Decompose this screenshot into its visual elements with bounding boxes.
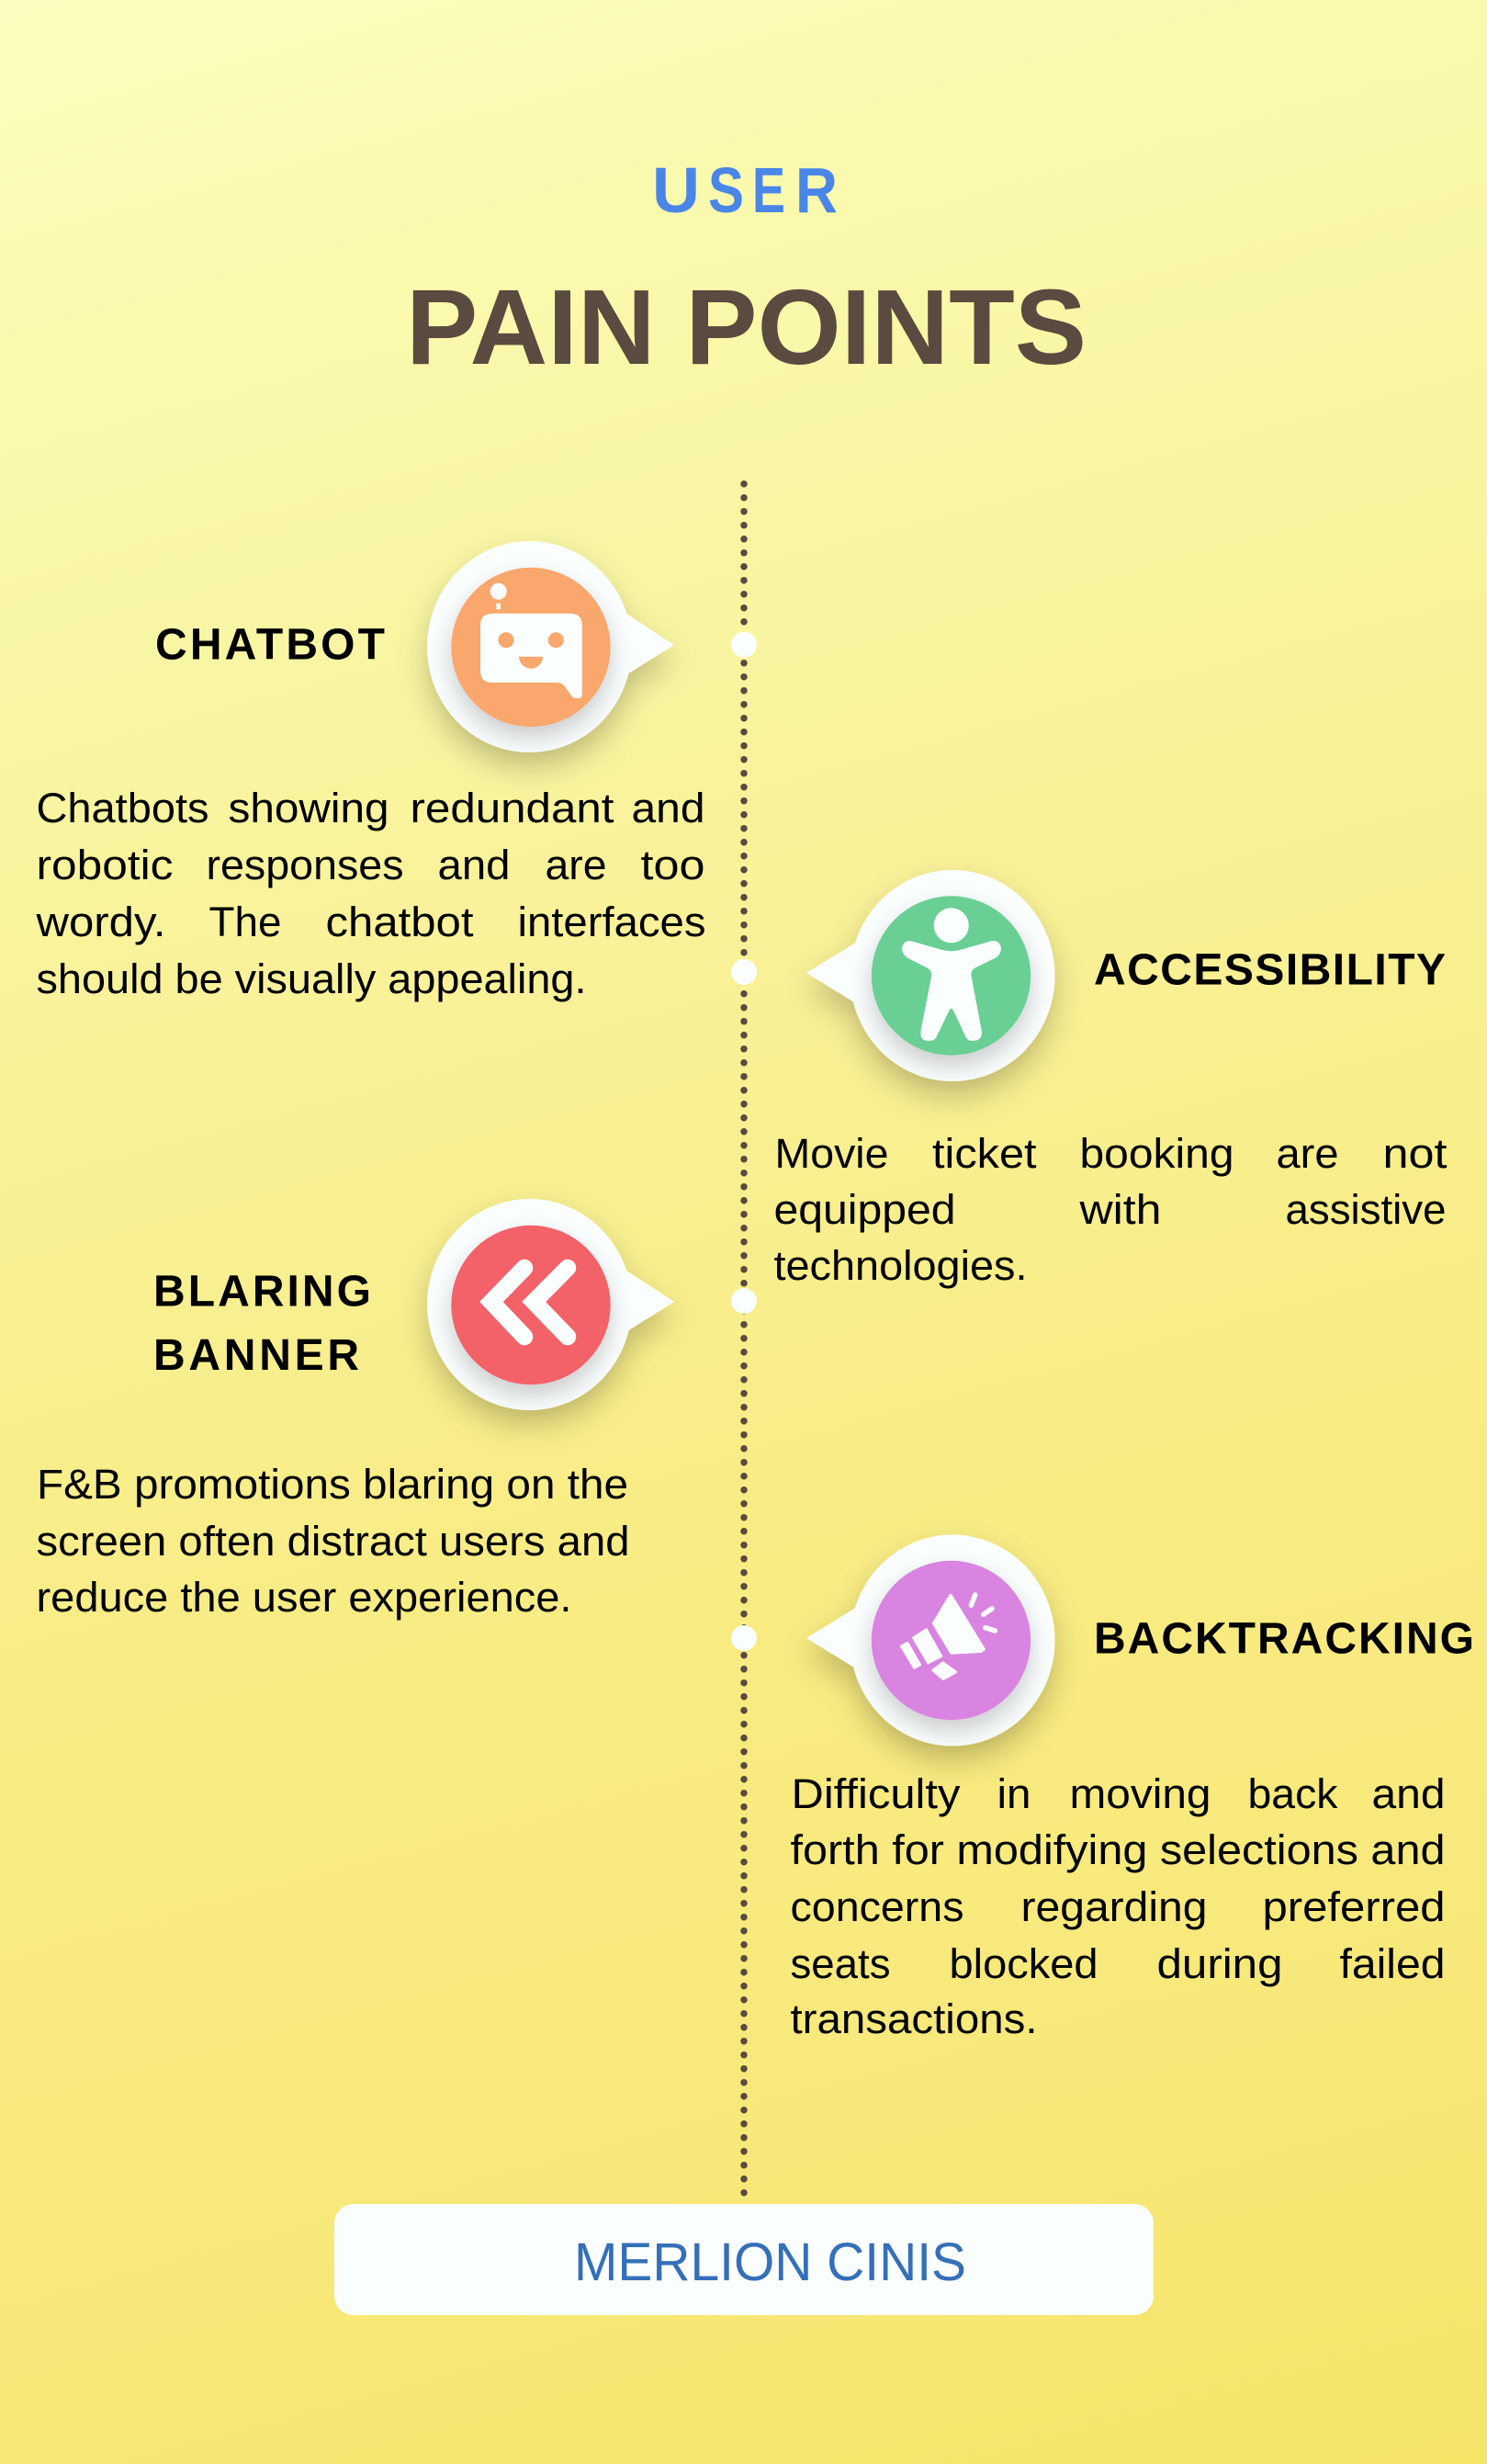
text block: accessibility description: equipped	[773, 1186, 955, 1233]
text block: chatbot description: too	[641, 842, 705, 888]
text block: accessibility description: with	[1078, 1186, 1161, 1233]
dotted timeline	[731, 484, 757, 2196]
text block: backtracking description: Difficulty	[792, 1770, 961, 1817]
text block: backtracking description: blocked	[950, 1940, 1098, 1987]
text block: backtracking description: and	[1372, 1770, 1446, 1817]
subtitle: USER: R	[795, 154, 838, 226]
subtitle: USER: E	[752, 154, 785, 226]
text block: accessibility description: not	[1383, 1130, 1448, 1177]
text block: accessibility description: ticket	[932, 1130, 1037, 1177]
text block: blaring banner description: F&B promotions blaring on the	[37, 1461, 628, 1508]
panel: accessibility	[773, 870, 1459, 1289]
heading: PAIN POINTS: PAIN POINTS	[406, 267, 1087, 387]
text block: backtracking description: failed	[1339, 1940, 1446, 1987]
text block: chatbot description: and	[437, 842, 511, 888]
text block: blaring banner description: reduce the user experience.	[37, 1574, 571, 1621]
title	[406, 154, 1087, 387]
text block: backtracking description: seats	[790, 1940, 891, 1987]
text block: backtracking description: transactions.	[790, 1995, 1038, 2042]
text block: chatbot description: redundant	[410, 785, 614, 831]
text block: accessibility description: assistive	[1286, 1186, 1446, 1233]
text block: accessibility description: booking	[1080, 1130, 1234, 1177]
text block: backtracking description: back	[1247, 1770, 1338, 1817]
heading: backtracking: BACKTRACKING	[1094, 1615, 1474, 1663]
text block: chatbot description: and	[632, 785, 705, 831]
text block: backtracking description: during	[1157, 1940, 1282, 1987]
text block: blaring banner description: screen often distract users and	[37, 1518, 630, 1565]
text block: accessibility description: are	[1277, 1130, 1339, 1177]
text block: chatbot description: Chatbots	[37, 785, 209, 831]
text block: chatbot description: robotic	[37, 842, 173, 888]
heading: accessibility: ACCESSIBILITY	[1094, 946, 1446, 994]
subtitle: USER: S	[708, 154, 744, 226]
footer label: MERLION CINIS: MERLION CINIS	[574, 2232, 966, 2292]
text block: backtracking description: forth for modifying selections and	[790, 1826, 1446, 1873]
icon: megaphone bubble	[806, 1534, 1054, 1746]
text block: chatbot description: responses	[206, 842, 404, 888]
icon: double chevron bubble	[427, 1199, 674, 1410]
text block: backtracking description: concerns	[790, 1883, 964, 1930]
icon: accessibility bubble	[806, 870, 1054, 1081]
subtitle: USER: U	[652, 154, 700, 226]
text block: chatbot description: chatbot	[325, 899, 474, 945]
icon: chatbot bubble	[427, 541, 674, 752]
text block: backtracking description: moving	[1069, 1770, 1211, 1817]
text block: chatbot description: should be visually appealing.	[37, 955, 586, 1002]
text block: chatbot description: interfaces	[518, 899, 705, 945]
text block: chatbot description: are	[546, 842, 606, 888]
text block: chatbot description: wordy.	[35, 899, 166, 945]
text block: backtracking description: in	[997, 1770, 1031, 1817]
text block: chatbot description: The	[209, 899, 281, 945]
heading: blaring banner: BLARING	[153, 1268, 371, 1316]
text block: accessibility description: Movie	[775, 1130, 889, 1177]
text block: backtracking description: regarding	[1021, 1883, 1207, 1930]
footer badge	[334, 2204, 1154, 2315]
panel: backtracking	[790, 1534, 1474, 2042]
text block: chatbot description: showing	[228, 785, 389, 831]
heading: blaring banner: BANNER	[153, 1331, 359, 1380]
panel: blaring banner	[37, 1199, 674, 1621]
heading: chatbot: CHATBOT	[155, 621, 385, 669]
text block: backtracking description: preferred	[1262, 1883, 1446, 1930]
text block: accessibility description: technologies.	[773, 1242, 1027, 1289]
panel: chatbot	[35, 541, 717, 1002]
